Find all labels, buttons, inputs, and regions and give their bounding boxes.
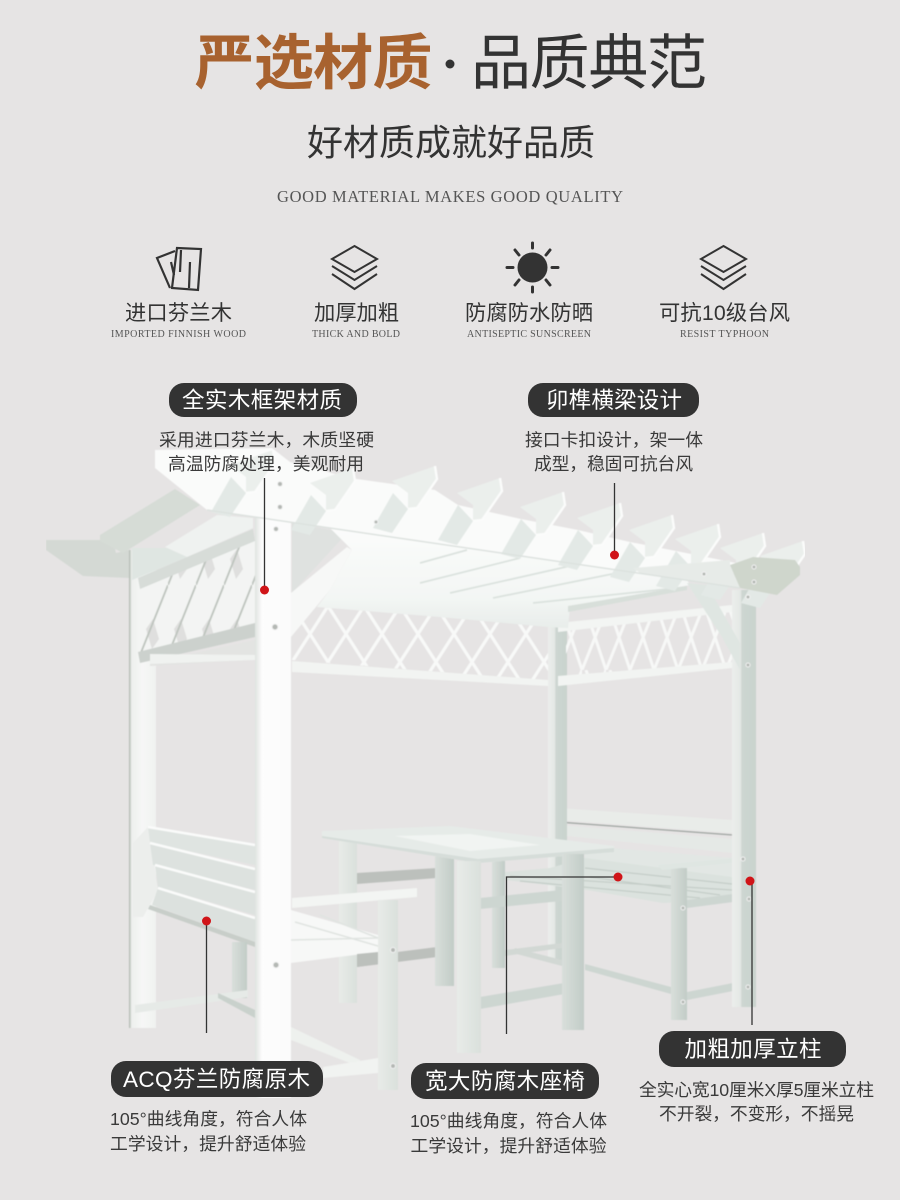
pointer bbox=[610, 483, 619, 560]
icon: layers bbox=[332, 246, 377, 289]
lattice rails bbox=[138, 529, 732, 686]
pill heading: ACQ芬兰防腐原木 bbox=[123, 1067, 310, 1092]
gray recess behind brace bbox=[292, 523, 347, 593]
description bbox=[159, 430, 374, 474]
title: 严选材质 bbox=[194, 30, 432, 97]
feature: resist typhoon: 可抗10级台风 bbox=[659, 301, 790, 325]
pointer bbox=[202, 916, 211, 1033]
description bbox=[110, 1109, 307, 1154]
feature: antiseptic sunscreen: ANTISEPTIC SUNSCREEN bbox=[467, 329, 591, 340]
icon: wood planks bbox=[157, 248, 201, 290]
description: 成型，稳固可抗台风 bbox=[534, 454, 693, 474]
callout: wide seat bbox=[410, 872, 622, 1156]
callout: thick post bbox=[639, 876, 874, 1124]
mid lattice bbox=[292, 605, 548, 682]
pointer bbox=[506, 872, 622, 1034]
subtitle: 好材质成就好品质 bbox=[307, 122, 595, 163]
pill heading: 全实木框架材质 bbox=[182, 388, 342, 413]
feature: resist typhoon: RESIST TYPHOON bbox=[680, 329, 769, 340]
right bench frame bbox=[585, 858, 740, 1020]
soffit under roof bbox=[317, 528, 690, 628]
description: 105°曲线角度，符合人体 bbox=[410, 1111, 607, 1131]
description bbox=[525, 430, 703, 474]
right lattice bbox=[566, 607, 732, 680]
english subtitle: GOOD MATERIAL MAKES GOOD QUALITY bbox=[277, 187, 623, 206]
roof planks and rafters bbox=[155, 448, 805, 608]
pill heading bbox=[659, 1031, 846, 1067]
callout: mortise and tenon beam bbox=[525, 383, 703, 560]
pill heading: 卯榫横梁设计 bbox=[546, 388, 682, 413]
description: 高温防腐处理，美观耐用 bbox=[168, 454, 364, 474]
near table legs and rails bbox=[457, 854, 584, 1053]
feature: imported Finnish wood: 进口芬兰木 bbox=[125, 301, 232, 325]
pill heading: 加粗加厚立柱 bbox=[684, 1037, 822, 1062]
description bbox=[410, 1111, 607, 1156]
left lattice bbox=[140, 540, 255, 652]
callout: solid wood frame bbox=[159, 383, 374, 594]
description: 全实心宽10厘米X厚5厘米立柱 bbox=[639, 1080, 874, 1100]
feature: thick and bold: THICK AND BOLD bbox=[312, 329, 400, 340]
feature: imported Finnish wood: IMPORTED FINNISH WOOD bbox=[111, 329, 246, 340]
left diagonal rafter bbox=[100, 489, 200, 553]
pill heading bbox=[169, 383, 357, 417]
white wooden pergola illustration bbox=[46, 448, 805, 1098]
left roof wedge bbox=[132, 515, 253, 580]
far table rails bbox=[357, 868, 437, 967]
right post bbox=[732, 590, 756, 1007]
left beam end bbox=[46, 540, 129, 578]
pill heading bbox=[528, 383, 699, 417]
pill heading bbox=[111, 1061, 323, 1097]
feature: thick and bold: 加厚加粗 bbox=[314, 301, 399, 325]
feature: antiseptic sunscreen: 防腐防水防晒 bbox=[465, 301, 593, 325]
description: 接口卡扣设计，架一体 bbox=[525, 430, 703, 450]
feature: imported Finnish wood bbox=[111, 248, 246, 340]
description: 105°曲线角度，符合人体 bbox=[110, 1109, 307, 1129]
callout: ACQ Finnish wood bbox=[110, 916, 323, 1154]
icon: layers bbox=[701, 246, 746, 289]
far table legs bbox=[339, 840, 505, 1003]
feature: thick and bold bbox=[312, 246, 400, 340]
back table rails bbox=[505, 943, 562, 966]
left bench bbox=[133, 827, 255, 1018]
description: 不开裂，不变形，不摇晃 bbox=[659, 1104, 854, 1124]
main post bbox=[255, 518, 291, 1098]
feature: resist typhoon bbox=[659, 246, 790, 340]
pill heading: 宽大防腐木座椅 bbox=[425, 1069, 585, 1094]
left post bbox=[129, 550, 156, 1028]
title bbox=[194, 30, 707, 97]
bolts bbox=[272, 482, 756, 1068]
pointer bbox=[260, 478, 269, 594]
pill heading bbox=[411, 1063, 599, 1099]
back center post bbox=[548, 600, 567, 960]
description: 采用进口芬兰木，木质坚硬 bbox=[159, 430, 374, 450]
right brace bbox=[687, 583, 740, 670]
description: 工学设计，提升舒适体验 bbox=[110, 1134, 306, 1154]
description: 工学设计，提升舒适体验 bbox=[410, 1136, 607, 1156]
feature: antiseptic sunscreen bbox=[465, 243, 593, 340]
pointer bbox=[746, 876, 754, 1025]
title: 品质典范 bbox=[471, 30, 707, 97]
icon: sun bbox=[507, 243, 558, 292]
left brace bbox=[291, 547, 352, 637]
right seat bbox=[493, 858, 732, 903]
description bbox=[639, 1080, 874, 1124]
back bench planks bbox=[558, 808, 733, 880]
table top bbox=[322, 826, 614, 863]
left seat and armrest bbox=[291, 888, 417, 1090]
